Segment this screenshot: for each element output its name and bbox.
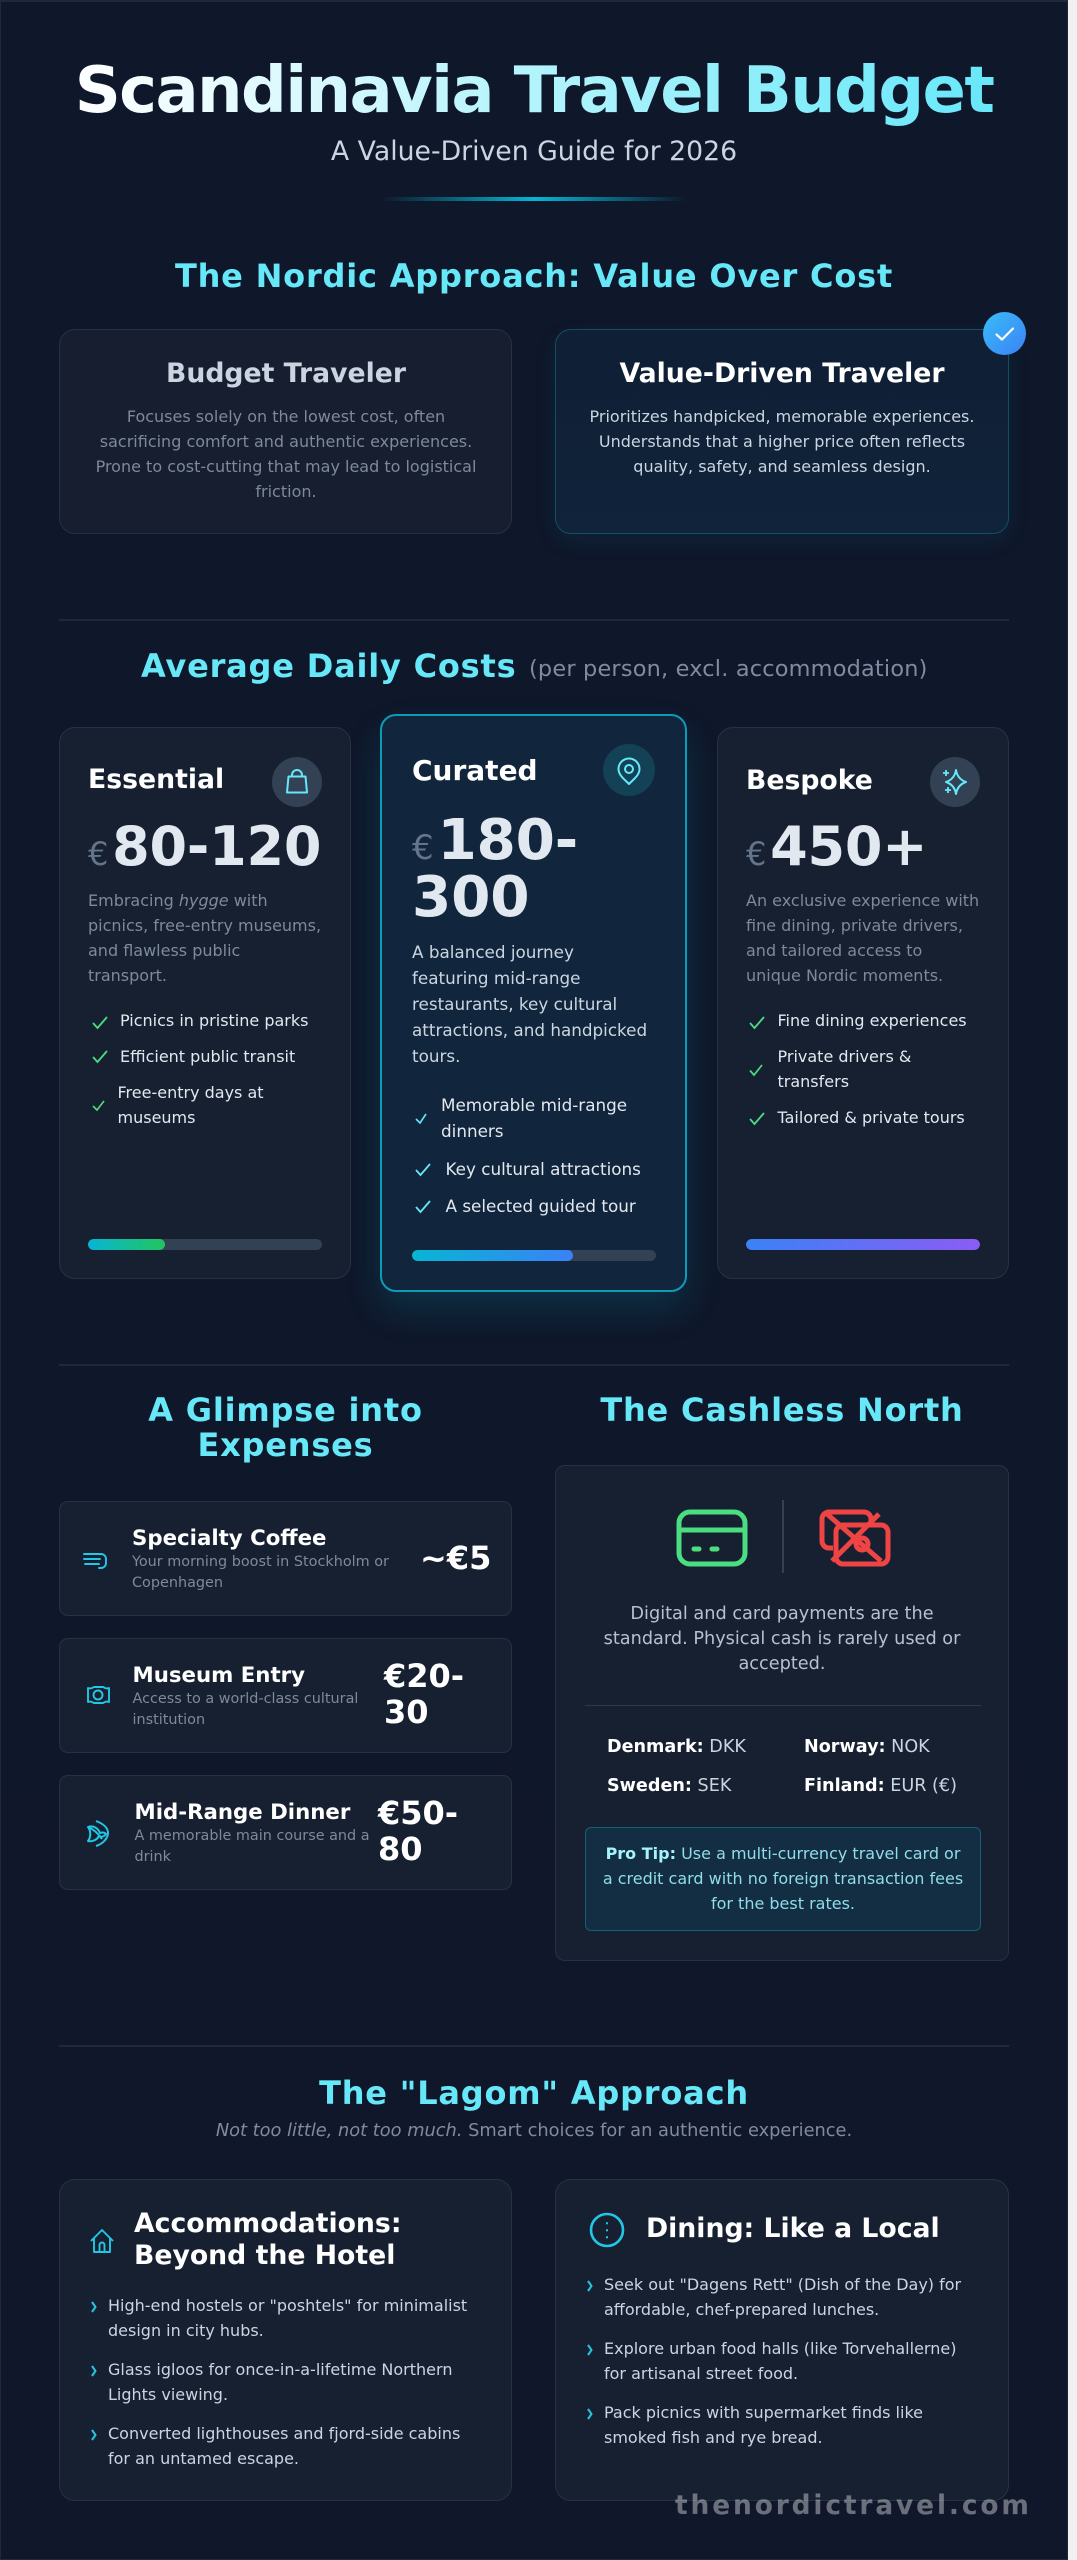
curated price: €180- — [412, 808, 578, 873]
budget traveler text: Prone to cost-cutting that may lead to logistical — [96, 457, 476, 476]
expense item: museum entry — [59, 1638, 512, 1753]
budget traveler text — [96, 407, 476, 501]
value-driven text: Prioritizes handpicked, memorable experiences. — [590, 407, 974, 426]
museum title and note: Museum Entry — [132, 1662, 305, 1688]
budget traveler text: sacrificing comfort and authentic experiences. — [100, 432, 472, 451]
dinner price: 80 — [378, 1830, 423, 1868]
heading: lagom approach: The "Lagom" Approach — [319, 2074, 749, 2112]
icon: sparkles — [930, 757, 980, 807]
curated checklist: Memorable mid-range — [441, 1095, 627, 1115]
accommodations list — [91, 2296, 467, 2468]
panel: accommodations — [59, 2179, 512, 2501]
icon: check badge — [983, 312, 1026, 355]
watermark: thenordictravel.com — [675, 2490, 1032, 2521]
curated description: featuring mid-range — [412, 968, 580, 988]
dining list: Explore urban food halls (like Torvehallerne) — [604, 2339, 956, 2358]
dinner title and note: Mid-Range Dinner — [134, 1800, 350, 1824]
lagom subtitle: Not too little, not too much. Smart choices for an authentic experience. — [216, 2120, 852, 2141]
bespoke cost bar — [746, 1239, 980, 1250]
icon: house — [90, 2229, 114, 2253]
currency list: Finland: EUR (€) — [804, 1776, 957, 1796]
bespoke description: An exclusive experience with — [746, 890, 979, 910]
curated price — [412, 808, 578, 930]
museum price: €20- — [384, 1657, 464, 1695]
bespoke description — [746, 890, 979, 984]
cashless text: Digital and card payments are the — [630, 1604, 934, 1624]
bespoke checklist: Private drivers & — [778, 1047, 911, 1066]
essential checklist: museums — [118, 1108, 195, 1127]
essential checklist: Free-entry days at — [118, 1083, 264, 1102]
bespoke description: and tailored access to — [746, 940, 922, 960]
value-driven text: quality, safety, and seamless design. — [633, 457, 931, 476]
pro tip: a credit card with no foreign transaction fees — [603, 1869, 963, 1888]
dinner title and note — [134, 1800, 370, 1865]
museum title and note: Access to a world-class cultural — [132, 1690, 358, 1706]
bespoke price: €450+ — [746, 815, 927, 878]
essential description: transport. — [88, 966, 167, 984]
bespoke checklist: Fine dining experiences — [778, 1011, 967, 1030]
heading: average daily costs — [141, 647, 928, 685]
museum price: 30 — [384, 1692, 429, 1730]
coffee title and note: Your morning boost in Stockholm or — [132, 1554, 389, 1570]
budget traveler heading: Budget Traveler — [166, 358, 406, 389]
text: (per person, excl. accommodation) — [529, 656, 928, 682]
cashless text: standard. Physical cash is rarely used or — [604, 1629, 960, 1649]
bespoke description: fine dining, private drivers, — [746, 916, 963, 934]
accommodations list: design in city hubs. — [108, 2321, 264, 2340]
bespoke name: Bespoke — [746, 765, 873, 796]
curated description: A balanced journey — [412, 942, 574, 962]
currency list — [607, 1736, 957, 1796]
accommodations list: High-end hostels or "poshtels" for minimalist — [108, 2296, 467, 2315]
expense item: specialty coffee — [59, 1501, 512, 1616]
curated checklist: A selected guided tour — [446, 1196, 636, 1216]
value-driven text — [590, 407, 974, 476]
dining list: Pack picnics with supermarket finds like — [604, 2403, 923, 2422]
title divider — [381, 197, 687, 201]
expense item: mid-range dinner — [59, 1775, 512, 1890]
bespoke checklist — [749, 1011, 967, 1127]
dining list: for artisanal street food. — [604, 2364, 798, 2383]
coffee title and note: Copenhagen — [132, 1575, 223, 1591]
coffee title and note — [132, 1526, 389, 1591]
panel: curated tier — [380, 714, 687, 1292]
dining list — [587, 2275, 962, 2447]
icon: fish dinner — [87, 1820, 109, 1847]
pro tip: Pro Tip: Use a multi-currency travel card or — [606, 1844, 960, 1863]
title: Scandinavia Travel Budget — [75, 54, 993, 128]
curated price: 300 — [412, 865, 529, 930]
value-driven text: Understands that a higher price often reflects — [599, 432, 965, 451]
icon: dining circle — [590, 2212, 624, 2248]
curated name: Curated — [412, 754, 538, 787]
bespoke checklist: Tailored & private tours — [778, 1108, 965, 1127]
essential description — [88, 890, 321, 984]
curated description: restaurants, key cultural — [412, 994, 617, 1014]
coffee price: ~€5 — [420, 1539, 491, 1577]
heading: glimpse into expenses: A Glimpse into — [148, 1391, 423, 1429]
budget traveler text: Focuses solely on the lowest cost, often — [127, 407, 445, 426]
dinner title and note: A memorable main course and a — [134, 1828, 370, 1844]
pro tip: for the best rates. — [711, 1894, 855, 1913]
budget traveler text: friction. — [255, 482, 317, 501]
accommodations heading: Beyond the Hotel — [134, 2240, 395, 2271]
museum price — [383, 1657, 464, 1730]
curated cost bar — [412, 1250, 656, 1261]
museum title and note: institution — [132, 1712, 205, 1728]
accommodations list: Lights viewing. — [108, 2385, 228, 2404]
dinner title and note: drink — [134, 1849, 171, 1865]
currency list: Sweden: SEK — [607, 1776, 731, 1796]
curated checklist: dinners — [441, 1121, 504, 1141]
essential checklist: Efficient public transit — [120, 1047, 295, 1066]
panel: budget traveler — [59, 329, 512, 534]
heading: average daily costs: Average Daily Costs — [141, 647, 516, 685]
curated checklist: Key cultural attractions — [446, 1158, 641, 1178]
essential checklist — [92, 1011, 308, 1127]
accommodations heading — [134, 2208, 402, 2271]
essential cost bar — [88, 1239, 322, 1250]
museum title and note — [132, 1662, 358, 1728]
heading: nordic approach: The Nordic Approach: Value Over Cost — [175, 256, 893, 294]
bespoke description: unique Nordic moments. — [746, 966, 943, 984]
panel: essential tier — [59, 727, 351, 1279]
essential description: picnics, free-entry museums, — [88, 916, 321, 934]
vertical divider — [782, 1500, 784, 1573]
accommodations list: Glass igloos for once-in-a-lifetime Northern — [108, 2360, 452, 2379]
heading: cashless north: The Cashless North — [600, 1391, 964, 1429]
icon: coffee — [83, 1553, 107, 1569]
accommodations heading: Accommodations: — [134, 2208, 402, 2239]
dinner price — [377, 1794, 458, 1868]
bespoke checklist: transfers — [778, 1072, 849, 1091]
curated description: attractions, and handpicked — [412, 1020, 647, 1040]
panel: value-driven traveler — [555, 329, 1009, 534]
heading: glimpse into expenses — [148, 1391, 423, 1464]
value-driven heading: Value-Driven Traveler — [619, 358, 945, 389]
cashless text — [604, 1604, 960, 1674]
dinner price: €50- — [378, 1794, 458, 1832]
panel: dining — [555, 2179, 1009, 2501]
icon: ticket camera — [87, 1686, 110, 1704]
essential description: and flawless public — [88, 940, 240, 960]
panel: cashless north — [555, 1465, 1009, 1961]
icon: no cash — [820, 1510, 890, 1566]
panel: bespoke tier — [717, 727, 1009, 1279]
curated description — [412, 942, 647, 1066]
coffee title and note: Specialty Coffee — [132, 1526, 327, 1550]
dining list: smoked fish and rye bread. — [604, 2428, 823, 2447]
essential name: Essential — [88, 764, 224, 795]
essential price: €80-120 — [88, 815, 321, 878]
accommodations list: for an untamed escape. — [108, 2449, 299, 2468]
heading: glimpse into expenses: Expenses — [197, 1426, 374, 1464]
essential description: Embracing hygge with — [88, 890, 268, 910]
pro tip — [585, 1827, 981, 1931]
curated checklist — [415, 1095, 641, 1216]
icon: map pin — [603, 744, 655, 796]
icon: credit card — [676, 1510, 748, 1566]
subtitle: A Value-Driven Guide for 2026 — [331, 136, 737, 167]
dining list: Seek out "Dagens Rett" (Dish of the Day) for — [604, 2275, 961, 2294]
accommodations list: Converted lighthouses and fjord-side cabins — [108, 2424, 460, 2443]
cashless text: accepted. — [738, 1654, 826, 1674]
dining list: affordable, chef-prepared lunches. — [604, 2300, 879, 2319]
icon: bag — [272, 757, 322, 807]
currency list: Norway: NOK — [804, 1736, 930, 1756]
essential checklist: Picnics in pristine parks — [120, 1011, 308, 1030]
currency list: Denmark: DKK — [607, 1736, 746, 1756]
curated description: tours. — [412, 1046, 460, 1066]
dining heading: Dining: Like a Local — [646, 2213, 940, 2244]
